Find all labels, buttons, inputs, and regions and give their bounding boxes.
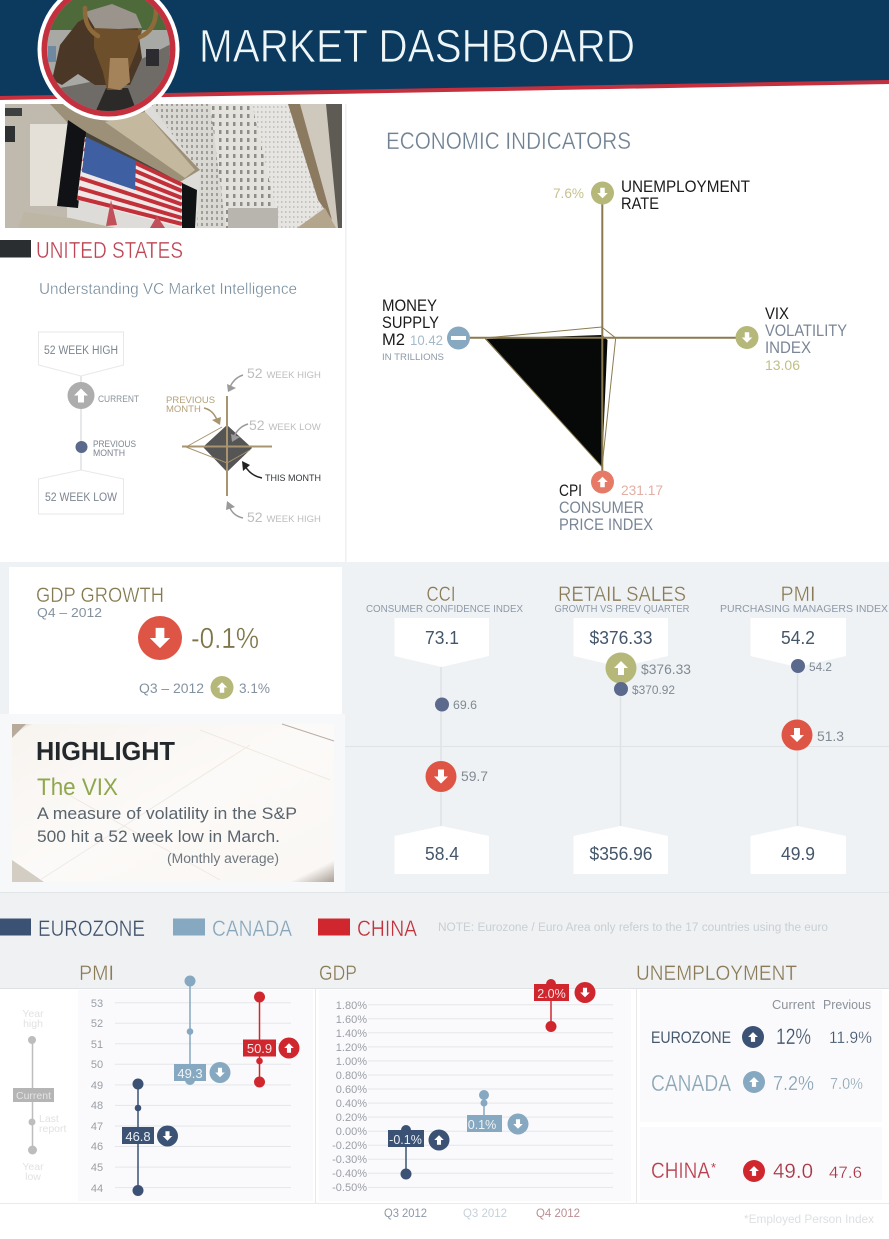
range: retail sales: RETAIL SALES [558, 583, 686, 606]
range: PMI: 54.2 [781, 628, 815, 648]
key: range scale [38, 332, 139, 514]
range: PMI [720, 583, 888, 874]
panel: GDP growth: Q3 – 2012 [139, 681, 204, 696]
row: Eurozone [651, 1024, 872, 1049]
key: PMI chart reading guide: Current [16, 1090, 51, 1102]
indicator: money supply: SUPPLY [382, 314, 439, 332]
indicator: VIX: INDEX [765, 339, 811, 357]
chart: GDP: 1.20% [336, 1042, 367, 1054]
indicator: unemployment rate: UNEMPLOYMENT [621, 178, 750, 196]
legend: regions: EUROZONE [38, 916, 145, 941]
legend: regions: CANADA [212, 916, 292, 941]
divider line [345, 746, 889, 747]
chart: PMI: 46 [91, 1141, 103, 1153]
panel: highlight: A measure of volatility in the S&P [37, 804, 297, 823]
indicator: money supply: IN TRILLIONS [382, 352, 444, 363]
series: Eurozone GDP [388, 1125, 450, 1180]
chart: GDP: 1.60% [336, 1014, 367, 1026]
table: unemployment [651, 998, 872, 1183]
indicator: unemployment rate: RATE [621, 195, 659, 213]
title: MARKET DASHBOARD [199, 20, 635, 72]
heading: PMI: PMI [79, 962, 114, 985]
indicator: CPI: CPI [559, 482, 582, 500]
range: retail sales [554, 583, 691, 874]
series: Canada GDP: 0.1% [468, 1118, 496, 1132]
panel: highlight: 500 hit a 52 week low in March. [37, 827, 280, 846]
chart: PMI: 53 [91, 998, 103, 1010]
quarter labels: Q3 2012 [384, 1206, 427, 1220]
series: China PMI [243, 992, 300, 1088]
row: China: 49.0 [773, 1160, 813, 1183]
chart: GDP: 0.00% [336, 1126, 367, 1138]
chart: PMI: 50 [91, 1059, 103, 1071]
panel: GDP growth [9, 567, 342, 714]
row: China: CHINA [651, 1158, 710, 1183]
heading: GDP: GDP [319, 962, 357, 985]
quarter labels: Q4 2012 [536, 1206, 580, 1220]
chart: PMI: 49 [91, 1080, 103, 1092]
range: CCI: CCI [426, 583, 456, 606]
chart: GDP: -0.50% [332, 1182, 367, 1194]
range: PMI: PMI [780, 583, 816, 606]
chart: GDP: -0.40% [332, 1168, 367, 1180]
chart: GDP: 0.80% [336, 1070, 367, 1082]
range: CCI [366, 583, 523, 874]
indicator: unemployment rate [553, 178, 750, 213]
row: Canada [651, 1070, 863, 1096]
key: mini radar [166, 365, 321, 525]
range: PMI: 54.2 [809, 660, 832, 674]
series: China PMI: 50.9 [247, 1041, 272, 1056]
indicator: money supply: M2 [382, 331, 405, 349]
footnote: *Employed Person Index [744, 1212, 874, 1226]
legend: regions [0, 916, 828, 941]
chart: GDP: 0.20% [336, 1112, 367, 1124]
indicator: VIX: VIX [765, 305, 789, 323]
indicator: money supply: MONEY [382, 297, 437, 315]
indicator: VIX: VOLATILITY [765, 322, 847, 340]
chart: GDP: 1.00% [336, 1056, 367, 1068]
chart: PMI: 52 [91, 1018, 103, 1030]
panel: GDP growth: GDP GROWTH [36, 584, 164, 607]
chart: PMI: 44 [91, 1183, 103, 1195]
row: Canada: CANADA [651, 1070, 732, 1096]
range: PMI: PURCHASING MANAGERS INDEX [720, 604, 888, 615]
key: mini radar: 52 WEEK HIGH [247, 365, 321, 381]
table: unemployment: Current [772, 998, 816, 1012]
panel: highlight: HIGHLIGHT [36, 736, 175, 766]
row: China: * [711, 1160, 716, 1175]
key: PMI chart reading guide [13, 1008, 67, 1183]
row: China: 47.6 [829, 1163, 862, 1182]
key: PMI chart reading guide: low [25, 1171, 41, 1183]
chart: PMI: 45 [91, 1162, 103, 1174]
chart: GDP: 0.40% [336, 1098, 367, 1110]
range: retail sales: $376.33 [641, 662, 691, 677]
table: unemployment: Previous [823, 998, 871, 1012]
row: Canada: 7.2% [773, 1073, 814, 1095]
row: Canada: 7.0% [830, 1076, 863, 1093]
key: PMI chart reading guide: Last [39, 1113, 59, 1125]
indicator: CPI: 231.17 [621, 482, 663, 498]
panel: highlight: The VIX [37, 774, 118, 801]
key: mini radar: THIS MONTH [265, 473, 321, 484]
key: PMI chart reading guide: high [23, 1018, 43, 1030]
panel: highlight: (Monthly average) [167, 850, 279, 866]
panel: GDP growth: Q4 – 2012 [37, 605, 102, 620]
row: Eurozone: 11.9% [829, 1028, 872, 1047]
key: PMI chart reading guide: report [39, 1123, 67, 1135]
indicator: money supply: 10.42 [410, 332, 443, 348]
legend: regions: CHINA [357, 916, 417, 941]
key: PMI chart reading guide: Year [22, 1008, 44, 1020]
header banner [0, 0, 889, 100]
panel backgrounds [78, 990, 882, 1201]
key: PMI chart reading guide: Year [22, 1161, 44, 1173]
key: mini radar: 52 WEEK LOW [249, 417, 321, 433]
chart: GDP: -0.30% [332, 1154, 367, 1166]
chart: GDP [332, 979, 613, 1194]
range: retail sales: $376.33 [590, 628, 652, 648]
key: range scale: CURRENT [98, 394, 139, 405]
chart: GDP: 0.60% [336, 1084, 367, 1096]
range: CCI: 59.7 [461, 769, 488, 784]
heading: economic indicators: ECONOMIC INDICATORS [386, 128, 631, 155]
chart: GDP: 1.40% [336, 1028, 367, 1040]
chart: GDP: 1.80% [336, 1000, 367, 1012]
indicator: CPI: PRICE INDEX [559, 516, 653, 534]
series: Canada PMI: 49.3 [177, 1066, 203, 1081]
range: retail sales: GROWTH VS PREV QUARTER [554, 604, 690, 615]
row: Eurozone: 12% [776, 1024, 811, 1049]
series: China GDP [534, 979, 596, 1032]
series: Eurozone PMI: 46.8 [125, 1129, 151, 1144]
subheading: Understanding VC Market Intelligence [39, 281, 297, 298]
key: range scale: 52 WEEK LOW [45, 492, 117, 504]
bull photo badge [38, 0, 180, 120]
series: Canada GDP [467, 1090, 528, 1134]
chart: PMI [91, 976, 300, 1196]
key: mini radar: PREVIOUS [166, 395, 215, 406]
key: mini radar: 52 WEEK HIGH [247, 509, 321, 525]
series: Eurozone PMI [122, 1078, 178, 1196]
key: range scale: MONTH [93, 448, 125, 459]
chart: GDP: -0.20% [332, 1140, 367, 1152]
panel: highlight [0, 714, 345, 892]
chart: PMI: 48 [91, 1100, 103, 1112]
indicator: unemployment rate: 7.6% [553, 185, 584, 201]
row: Eurozone: EUROZONE [651, 1028, 731, 1047]
heading: unemployment: UNEMPLOYMENT [636, 962, 797, 985]
indicator: CPI [559, 470, 663, 534]
range: CCI: 73.1 [425, 628, 459, 648]
range: retail sales: $370.92 [632, 683, 675, 697]
key: range scale: 52 WEEK HIGH [44, 345, 118, 357]
range: PMI: 49.9 [781, 844, 815, 864]
indicator: VIX: 13.06 [765, 357, 800, 373]
indicator: CPI: CONSUMER [559, 499, 644, 517]
range: CCI: CONSUMER CONFIDENCE INDEX [366, 604, 523, 615]
key: mini radar: MONTH [166, 404, 201, 415]
range: PMI: 51.3 [817, 729, 844, 744]
panel: GDP growth: -0.1% [191, 623, 259, 655]
chart: PMI: 47 [91, 1121, 103, 1133]
chart: PMI: 51 [91, 1039, 103, 1051]
row: China [651, 1158, 862, 1183]
series: Canada PMI [174, 976, 230, 1085]
range: CCI: 69.6 [453, 698, 477, 712]
indicator: VIX [736, 305, 847, 373]
key: range scale: PREVIOUS [93, 439, 136, 450]
photo: New York Stock Exchange [5, 104, 342, 228]
panel: GDP growth: 3.1% [239, 681, 270, 696]
legend: regions: NOTE: Eurozone / Euro Area only refers to the 17 countries using the euro [438, 922, 828, 934]
series: China GDP: 2.0% [537, 987, 566, 1001]
radar chart: economic indicators [382, 178, 847, 534]
heading: United States: UNITED STATES [36, 237, 183, 263]
indicator: money supply [382, 297, 470, 363]
range: CCI: 58.4 [425, 844, 459, 864]
range: retail sales: $356.96 [590, 844, 652, 864]
series: Eurozone GDP: -0.1% [389, 1133, 422, 1147]
heading: United States [0, 237, 183, 263]
quarter labels: Q3 2012 [463, 1206, 507, 1220]
quarter labels [384, 1206, 580, 1220]
